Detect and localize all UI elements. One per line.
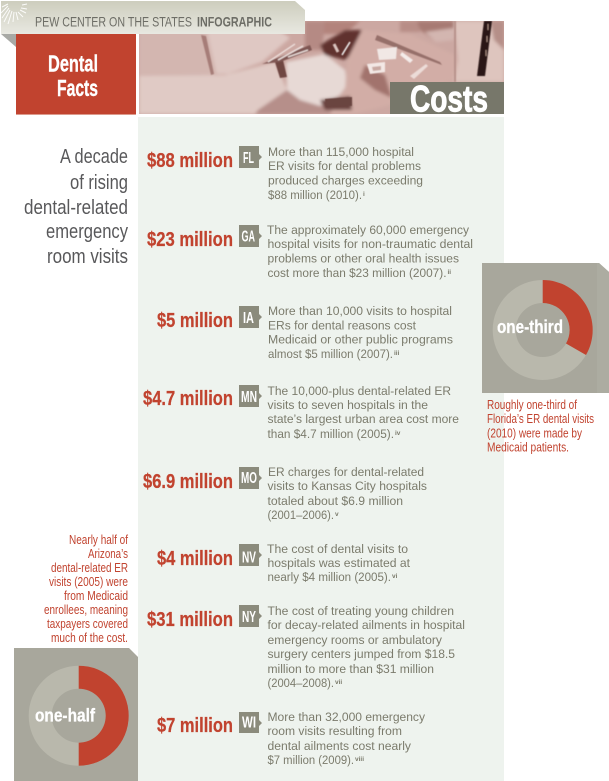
row: Missouri: $6.9 million	[143, 470, 233, 493]
row: Minnesota	[143, 384, 459, 441]
row: Minnesota: MN	[241, 389, 257, 406]
title tag: Costs: Costs	[410, 79, 488, 120]
row: Iowa	[157, 304, 453, 361]
row: Florida: FL	[243, 150, 254, 167]
row: Iowa: More than 10,000 visits to hospital	[268, 304, 452, 318]
row: Florida: i	[363, 191, 365, 198]
row: Wisconsin: $7 million (2009).	[268, 753, 354, 767]
red box: Dental Facts heading: Facts	[57, 75, 98, 101]
caption: Florida Medicaid share: (2010) were made by	[487, 426, 582, 440]
row: Georgia: hospital visits for non-traumatic dental	[268, 237, 473, 251]
banner: Pew Center on the States Infographic: INFOGRAPHIC	[197, 14, 272, 30]
row: New York: vii	[335, 679, 342, 686]
row: Missouri: totaled about $6.9 million	[268, 494, 403, 508]
row: Nevada: hospitals was estimated at	[268, 556, 411, 570]
row: Wisconsin: viii	[355, 756, 364, 763]
row: New York	[147, 604, 465, 690]
row: New York: $31 million	[147, 608, 233, 631]
row: New York: million to more than $31 million	[268, 662, 434, 676]
row: Missouri: ER charges for dental-related	[268, 465, 424, 479]
row: Iowa: IA	[243, 310, 254, 327]
row: Wisconsin	[157, 710, 426, 767]
row: Florida: ER visits for dental problems	[268, 159, 421, 173]
red box: Dental Facts heading: Dental	[48, 51, 98, 77]
caption: Arizona Medicaid share: enrollees, meaning	[44, 602, 128, 617]
red box: Dental Facts heading	[16, 34, 136, 115]
row: Missouri: v	[335, 511, 339, 518]
row: Florida: $88 million	[147, 149, 233, 172]
row: Florida	[147, 145, 423, 202]
row: Iowa: $5 million	[157, 309, 233, 332]
row: Minnesota: $4.7 million	[143, 387, 233, 410]
row: New York: for decay-related ailments in hospital	[268, 618, 465, 632]
row: New York: The cost of treating young children	[268, 604, 454, 618]
panel: costs background	[138, 117, 504, 781]
row: Nevada: The cost of dental visits to	[267, 542, 408, 556]
donut chart: one-half: one-half	[35, 704, 96, 726]
row: Iowa: ERs for dental reasons cost	[268, 318, 417, 332]
caption: Florida Medicaid share	[487, 397, 594, 454]
banner: Pew Center on the States Infographic: PEW CENTER ON THE STATES	[35, 14, 192, 30]
caption: Arizona Medicaid share	[44, 532, 128, 645]
banner: Pew Center on the States Infographic	[1, 1, 305, 47]
heading: a decade of rising dental-related emergency room visits: emergency	[46, 221, 128, 243]
row: Wisconsin: room visits resulting from	[268, 724, 402, 738]
callout: one-third donut card	[482, 263, 609, 393]
row: Missouri: (2001–2006).	[268, 508, 334, 522]
row: Missouri: visits to Kansas City hospitals	[268, 479, 427, 493]
caption: Arizona Medicaid share: Nearly half of	[69, 532, 128, 547]
caption: Arizona Medicaid share: Arizona’s	[88, 546, 128, 561]
row: New York: NY	[242, 609, 256, 626]
row: Nevada: nearly $4 million (2005).	[268, 570, 391, 584]
caption: Arizona Medicaid share: much of the cost.	[51, 630, 128, 645]
caption: Florida Medicaid share: Medicaid patients.	[487, 440, 569, 454]
row: New York: emergency rooms or ambulatory	[268, 633, 443, 647]
row: Iowa: iii	[394, 350, 400, 357]
row: Nevada: NV	[242, 550, 256, 567]
row: Wisconsin: $7 million	[157, 714, 233, 737]
heading: a decade of rising dental-related emergency room visits: A decade	[60, 146, 128, 168]
row: Minnesota: than $4.7 million (2005).	[268, 427, 394, 441]
row: Minnesota: state’s largest urban area cost more	[268, 412, 459, 426]
caption: Florida Medicaid share: Roughly one-third of	[487, 397, 577, 412]
donut chart: one-third: one-third	[497, 316, 563, 337]
caption: Arizona Medicaid share: from Medicaid	[64, 588, 128, 603]
caption: Arizona Medicaid share: dental-related ER	[51, 560, 128, 575]
heading: a decade of rising dental-related emergency room visits: of rising	[70, 172, 128, 194]
row: Wisconsin: WI	[242, 715, 256, 732]
row: New York: surgery centers jumped from $18.5	[268, 647, 455, 661]
row: Minnesota: visits to seven hospitals in the	[268, 398, 428, 412]
heading: a decade of rising dental-related emergency room visits: room visits	[47, 246, 128, 268]
caption: Arizona Medicaid share: taxpayers covered	[47, 616, 128, 631]
row: Iowa: almost $5 million (2007).	[268, 347, 393, 361]
caption: Arizona Medicaid share: visits (2005) were	[49, 574, 128, 589]
row: Georgia: cost more than $23 million (2007).	[268, 266, 446, 280]
row: Georgia: $23 million	[147, 228, 233, 251]
heading: a decade of rising dental-related emergency room visits	[24, 146, 128, 268]
row: Nevada	[157, 542, 411, 584]
heading: a decade of rising dental-related emergency room visits: dental-related	[24, 197, 128, 219]
row: New York: (2004–2008).	[268, 676, 334, 690]
photo: gloved hands in dental surgery	[139, 21, 504, 114]
row: Georgia	[147, 223, 473, 280]
row: Missouri	[143, 465, 427, 522]
row: Minnesota: iv	[395, 430, 401, 437]
callout: one-half donut card	[14, 648, 138, 781]
row: Georgia: problems or other oral health issues	[268, 252, 459, 266]
row: Wisconsin: More than 32,000 emergency	[268, 710, 426, 724]
row: Nevada: $4 million	[157, 547, 233, 570]
row: Minnesota: The 10,000-plus dental-related ER	[268, 384, 451, 398]
row: Wisconsin: dental ailments cost nearly	[268, 739, 412, 753]
row: Missouri: MO	[241, 470, 257, 487]
row: Florida: $88 million (2010).	[268, 188, 362, 202]
row: Florida: More than 115,000 hospital	[268, 145, 414, 159]
row: Georgia: The approximately 60,000 emergency	[267, 223, 470, 237]
row: Iowa: Medicaid or other public programs	[268, 332, 453, 346]
row: Georgia: GA	[242, 229, 255, 246]
row: Florida: produced charges exceeding	[268, 174, 423, 188]
row: Georgia: ii	[448, 269, 451, 276]
row: Nevada: vi	[392, 573, 398, 580]
